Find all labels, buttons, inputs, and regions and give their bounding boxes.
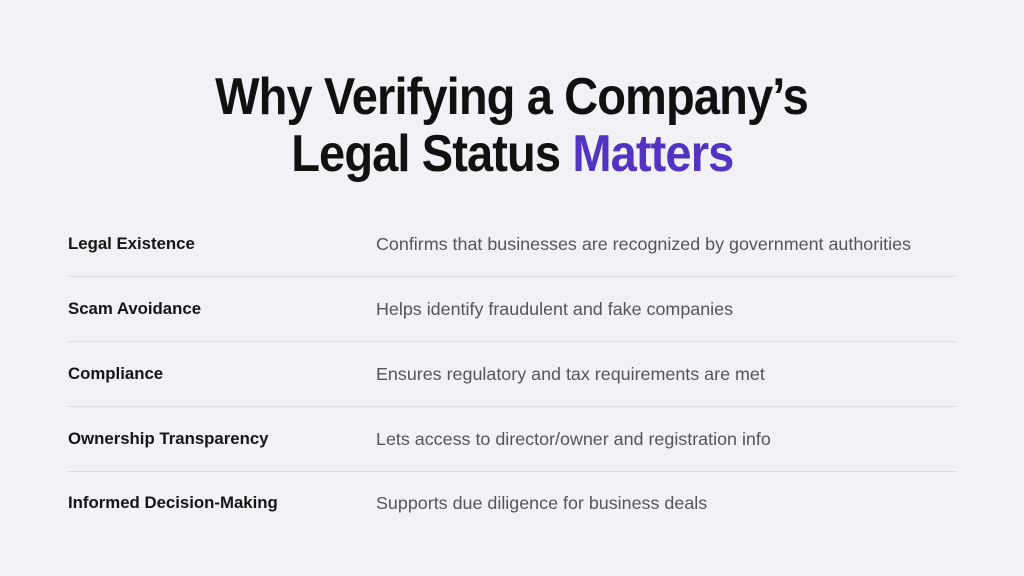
row: scam avoidance: Helps identify fraudulent and fake companies bbox=[376, 299, 733, 319]
row: legal existence bbox=[68, 234, 911, 254]
row: legal existence: Legal Existence bbox=[68, 234, 195, 253]
row: scam avoidance bbox=[68, 299, 733, 319]
row: informed decision-making bbox=[68, 493, 707, 513]
row: informed decision-making: Supports due diligence for business deals bbox=[376, 493, 707, 513]
row: ownership transparency: Lets access to director/owner and registration info bbox=[376, 429, 771, 449]
row: scam avoidance: Scam Avoidance bbox=[68, 299, 201, 318]
title: Why Verifying a Company’s bbox=[216, 68, 808, 126]
row: ownership transparency bbox=[68, 429, 771, 449]
row: legal existence: Confirms that businesses are recognized by government authorities bbox=[376, 234, 911, 254]
row: compliance bbox=[68, 364, 765, 384]
row: compliance: Compliance bbox=[68, 364, 163, 383]
row: compliance: Ensures regulatory and tax requirements are met bbox=[376, 364, 765, 384]
row: ownership transparency: Ownership Transparency bbox=[68, 429, 269, 448]
title: Legal Status Matters bbox=[291, 125, 733, 183]
title bbox=[215, 68, 808, 183]
row: informed decision-making: Informed Decision-Making bbox=[68, 493, 278, 512]
